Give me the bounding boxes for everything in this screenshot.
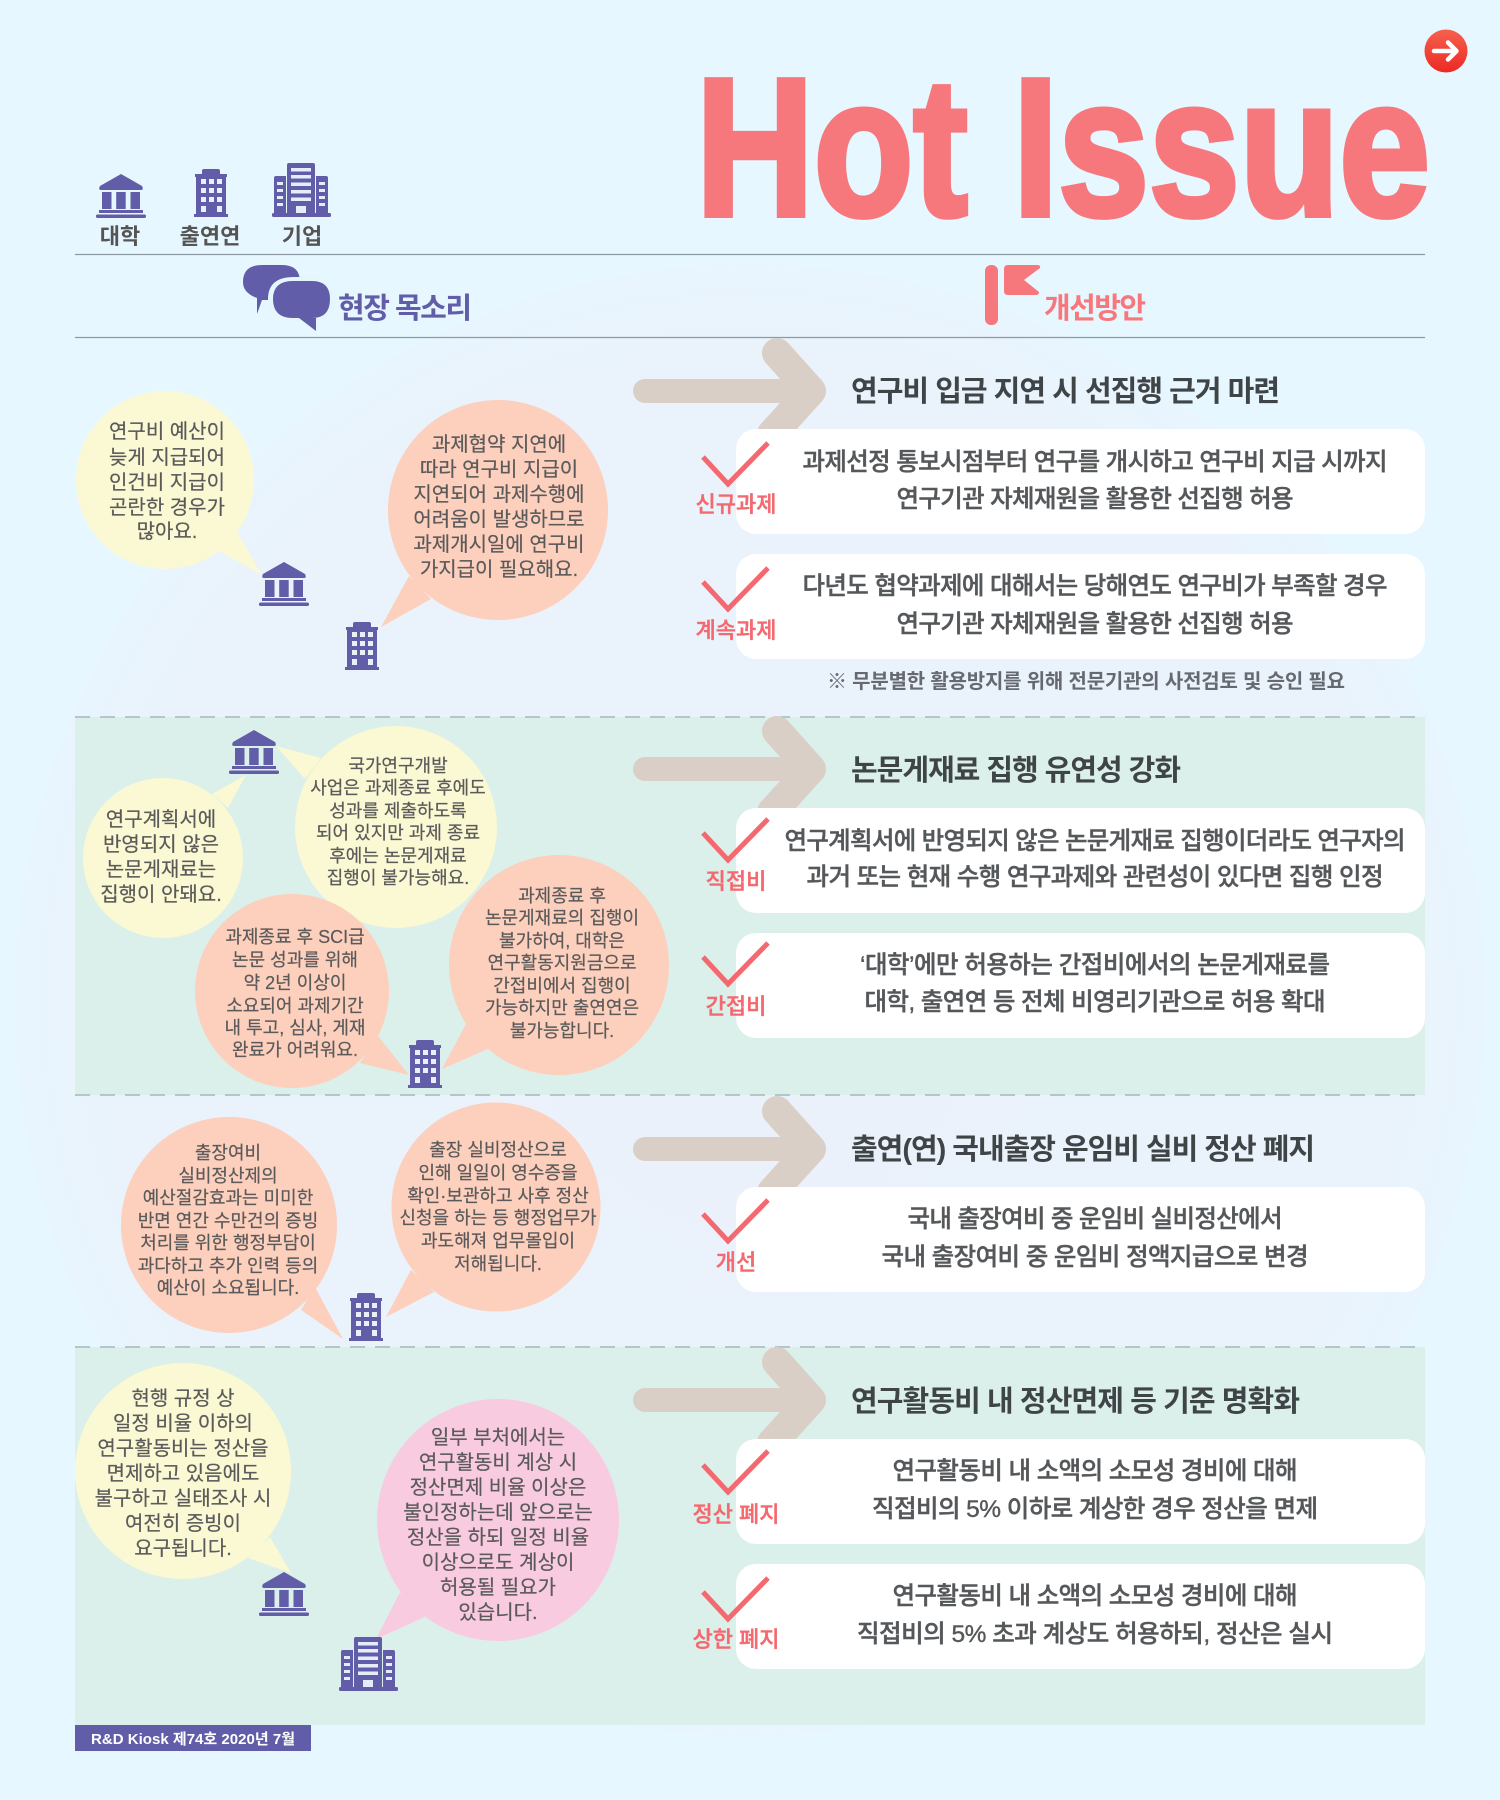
bubble: university voice [75, 1363, 291, 1579]
legend: institution types [96, 163, 331, 249]
check: direct costs [703, 819, 768, 860]
bubble: institute voice: 따라 연구비 지급이 [420, 458, 578, 481]
bubble: university voice: 연구활동비는 정산을 [97, 1437, 269, 1460]
panel: publication fees [83, 726, 1425, 1088]
label: indirect costs: 간접비 [706, 994, 766, 1019]
card: cap abolition [736, 1564, 1425, 1669]
bubble: university voice: 많아요. [137, 520, 197, 543]
bubble: university voice 2: 후에는 논문게재료 [329, 846, 467, 866]
bubble: institute voice 1 [121, 1117, 343, 1339]
bubble: university voice: 불구하고 실태조사 시 [95, 1487, 271, 1510]
icon: university [259, 562, 309, 606]
bubble: institute voice 2: 출장 실비정산으로 [429, 1140, 567, 1160]
arrow [645, 731, 811, 812]
bubble: university voice: 인건비 지급이 [109, 471, 225, 494]
bubble: institute voice 1: 완료가 어려워요. [232, 1040, 358, 1060]
bubble: university voice: 요구됩니다. [134, 1537, 232, 1560]
bubble: university voice 2: 사업은 과제종료 후에도 [310, 778, 486, 798]
bubble: institute voice 2: 불가하여, 대학은 [499, 931, 625, 951]
icon: institute [408, 1040, 442, 1088]
bubble: company voice: 허용될 필요가 [440, 1576, 556, 1599]
card: new projects [736, 429, 1425, 534]
bubble: institute voice 1: 처리를 위한 행정부담이 [140, 1233, 316, 1253]
bubble: company voice: 있습니다. [458, 1601, 538, 1624]
panel: advance spending [76, 353, 1425, 693]
bubble: institute voice: 어려움이 발생하므로 [413, 508, 585, 531]
bubble: university voice: 곤란한 경우가 [109, 496, 225, 519]
icon: university [229, 730, 279, 774]
bubble: institute voice 1: 반면 연간 수만건의 증빙 [138, 1211, 318, 1231]
card: continuing projects [736, 554, 1425, 659]
bubble: institute voice 1: 예산이 소요됩니다. [157, 1278, 299, 1298]
bubble: university voice 1: 연구계획서에 [106, 808, 216, 831]
section heading: 연구비 입금 지연 시 선집행 근거 마련 [851, 375, 1280, 408]
bubble: institute voice: 과제협약 지연에 [432, 433, 566, 456]
card: improvement [736, 1187, 1425, 1292]
icon: flag [985, 265, 1040, 325]
icon: research institute [194, 169, 228, 217]
card: indirect costs: ‘대학’에만 허용하는 간접비에서의 논문게재료를 [860, 951, 1330, 979]
bubble: institute voice: 과제개시일에 연구비 [413, 533, 585, 556]
card: cap abolition: 연구활동비 내 소액의 소모성 경비에 대해 [892, 1582, 1298, 1610]
label: continuing projects: 계속과제 [696, 618, 776, 643]
card: direct costs: 과거 또는 현재 수행 연구과제와 관련성이 있다면 집행 인정 [806, 863, 1384, 891]
bubble: institute voice 2: 저해됩니다. [454, 1254, 542, 1274]
bubble: university voice 1: 집행이 안돼요. [100, 883, 222, 906]
bubble: institute voice 2: 과제종료 후 [518, 886, 606, 906]
bubble: institute voice 1: 과다하고 추가 인력 등의 [138, 1256, 318, 1276]
bubble: institute voice 1 [195, 894, 409, 1088]
bubble: institute voice: 가지급이 필요해요. [420, 558, 578, 581]
label: new projects: 신규과제 [696, 492, 776, 517]
section heading: 논문게재료 집행 유연성 강화 [851, 754, 1181, 787]
card: settlement exemption: 연구활동비 내 소액의 소모성 경비에 대해 [892, 1457, 1298, 1485]
label: improvement: 개선 [716, 1250, 756, 1275]
bubble: institute voice 2: 과도해져 업무몰입이 [421, 1231, 575, 1251]
label: cap abolition: 상한 폐지 [692, 1627, 780, 1652]
label: company: 기업 [282, 224, 322, 249]
bubble: institute voice 1: 실비정산제의 [178, 1166, 278, 1186]
bubble: institute voice 2: 신청을 하는 등 행정업무가 [399, 1208, 597, 1228]
label: settlement exemption: 정산 폐지 [692, 1502, 780, 1527]
card: indirect costs [736, 933, 1425, 1038]
heading: improvement plan [985, 265, 1146, 325]
bubble: institute voice 2: 확인·보관하고 사후 정산 [407, 1186, 589, 1206]
icon: institute [349, 1293, 383, 1341]
section heading: 출연(연) 국내출장 운임비 실비 정산 폐지 [851, 1133, 1315, 1166]
heading text: 개선방안 [1044, 292, 1146, 325]
bubble: university voice: 늦게 지급되어 [109, 446, 225, 469]
bubble: institute voice: 지연되어 과제수행에 [413, 483, 585, 506]
footer tag [75, 1725, 311, 1751]
arrow [645, 1111, 811, 1192]
bubble: university voice 2: 집행이 불가능해요. [327, 868, 469, 888]
bubble: university voice: 일정 비율 이하의 [113, 1412, 253, 1435]
bubble: institute voice [381, 400, 608, 627]
check: new projects [703, 443, 768, 484]
card: continuing projects: 연구기관 자체재원을 활용한 선집행 허용 [896, 610, 1294, 638]
icon: speech bubbles [243, 265, 336, 331]
check: improvement [703, 1200, 768, 1241]
bubble: company voice: 정산을 하되 일정 비율 [407, 1526, 589, 1549]
card: indirect costs: 대학, 출연연 등 전체 비영리기관으로 허용 확대 [864, 988, 1326, 1016]
section band: paper publication fees [75, 717, 1425, 1095]
bubble: institute voice 2: 간접비에서 집행이 [493, 976, 631, 996]
bubble: university voice 2: 성과를 제출하도록 [329, 801, 467, 821]
panel: activity costs [75, 1362, 1425, 1691]
heading: field voices [243, 265, 472, 331]
check: cap abolition [703, 1578, 768, 1619]
arrow [645, 353, 811, 434]
card: settlement exemption: 직접비의 5% 이하로 계상한 경우 정산을 면제 [872, 1495, 1318, 1523]
bubble: institute voice 2: 인해 일일이 영수증을 [418, 1163, 578, 1183]
check: settlement exemption [703, 1451, 768, 1492]
section heading: 연구활동비 내 정산면제 등 기준 명확화 [851, 1385, 1300, 1418]
footnote: ※ 무분별한 활용방지를 위해 전문기관의 사전검토 및 승인 필요 [827, 670, 1345, 693]
icon: next arrow button [1424, 30, 1468, 72]
section band: activity costs [75, 1347, 1425, 1725]
card: direct costs: 연구계획서에 반영되지 않은 논문게재료 집행이더라도 연구자의 [784, 827, 1406, 855]
bubble: university voice: 면제하고 있음에도 [107, 1462, 259, 1485]
bubble: institute voice 1: 논문 성과를 위해 [232, 950, 358, 970]
card: improvement: 국내 출장여비 중 운임비 정액지급으로 변경 [882, 1243, 1308, 1271]
arrow [645, 1362, 811, 1443]
label: research institute: 출연연 [180, 224, 240, 249]
bubble: company voice: 이상으로도 계상이 [422, 1551, 574, 1574]
icon: university [96, 174, 146, 218]
bubble: company voice: 불인정하는데 앞으로는 [403, 1501, 593, 1524]
bubble: university voice: 현행 규정 상 [131, 1387, 235, 1410]
check: indirect costs [703, 943, 768, 984]
label: direct costs: 직접비 [706, 869, 766, 894]
card: cap abolition: 직접비의 5% 초과 계상도 허용하되, 정산은 실시 [857, 1620, 1333, 1648]
bubble: university voice 2: 되어 있지만 과제 종료 [316, 823, 480, 843]
bubble: institute voice 1: 내 투고, 심사, 게재 [225, 1018, 365, 1038]
bubble: university voice: 연구비 예산이 [109, 420, 225, 443]
icon: company [339, 1637, 398, 1691]
bubble: institute voice 1: 예산절감효과는 미미한 [143, 1188, 313, 1208]
card: new projects: 과제선정 통보시점부터 연구를 개시하고 연구비 지급 시까지 [802, 448, 1388, 476]
icon: company [272, 163, 331, 217]
bubble: university voice 1: 반영되지 않은 [103, 833, 219, 856]
label: university: 대학 [100, 224, 140, 249]
heading text: 현장 목소리 [338, 292, 472, 325]
bubble: institute voice 2: 가능하지만 출연연은 [485, 998, 639, 1018]
icon: institute [345, 622, 379, 670]
card: direct costs [736, 808, 1425, 913]
bubble: company voice: 연구활동비 계상 시 [419, 1451, 577, 1474]
card: settlement exemption [736, 1439, 1425, 1544]
card: continuing projects: 다년도 협약과제에 대해서는 당해연도 연구비가 부족할 경우 [802, 572, 1388, 600]
bubble: company voice: 정산면제 비율 이상은 [410, 1476, 586, 1499]
card: improvement: 국내 출장여비 중 운임비 실비정산에서 [908, 1205, 1282, 1233]
bubble: institute voice 2: 불가능합니다. [510, 1021, 614, 1041]
bubble: university voice [76, 391, 262, 575]
bubble: university voice 1 [83, 775, 246, 938]
bubble: institute voice 1: 소요되어 과제기간 [226, 996, 364, 1016]
check: continuing projects [703, 568, 768, 609]
bubble: university voice: 여전히 증빙이 [125, 1512, 241, 1535]
footer tag: R&D Kiosk 제74호 2020년 7월 [91, 1731, 295, 1748]
icon: university [259, 1572, 309, 1616]
bubble: university voice 2: 국가연구개발 [348, 756, 448, 776]
bubble: university voice 1: 논문게재료는 [106, 858, 216, 881]
bubble: university voice 2 [276, 726, 497, 928]
card: new projects: 연구기관 자체재원을 활용한 선집행 허용 [896, 485, 1294, 513]
bubble: company voice [376, 1399, 619, 1641]
bubble: institute voice 2 [442, 855, 669, 1075]
bubble: company voice: 일부 부처에서는 [431, 1426, 565, 1449]
bubble: institute voice 1: 약 2년 이상이 [244, 973, 346, 993]
panel: domestic travel [121, 1102, 1425, 1341]
bubble: institute voice 2: 연구활동지원금으로 [487, 953, 637, 973]
bubble: institute voice 2: 논문게재료의 집행이 [485, 908, 639, 928]
bubble: institute voice 1: 출장여비 [195, 1143, 261, 1163]
bubble: institute voice 2 [386, 1102, 600, 1317]
bubble: institute voice 1: 과제종료 후 SCI급 [225, 927, 365, 947]
